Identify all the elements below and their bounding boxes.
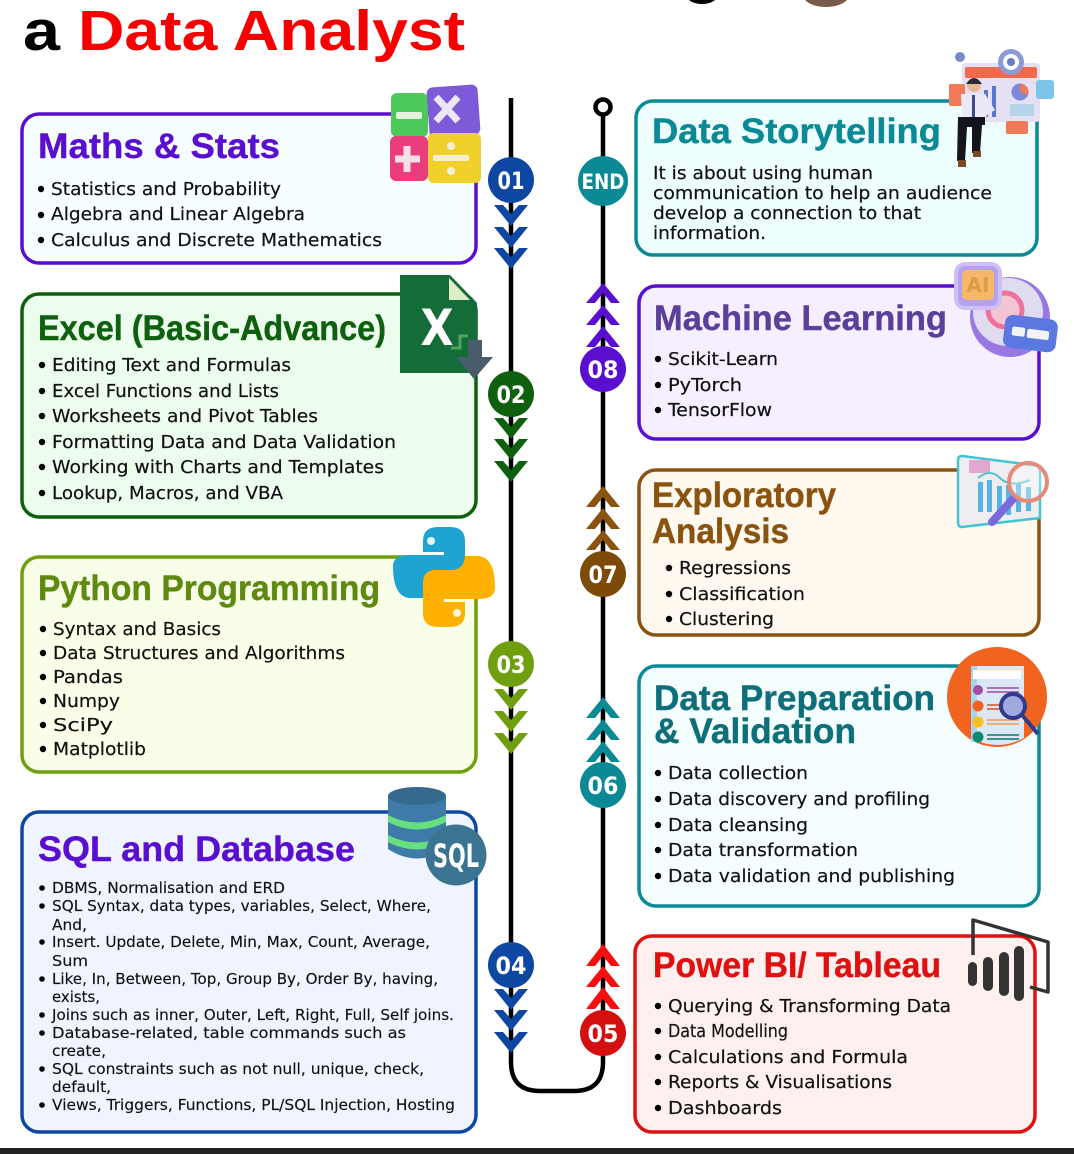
icon: python logo — [393, 527, 495, 627]
heading: SQL and Database — [38, 830, 355, 869]
list: Algebra and Linear Algebra — [51, 204, 305, 225]
panel: power bi and tableau — [635, 920, 1048, 1132]
icon: maths cubes — [390, 84, 481, 183]
marker: 01 with chevrons: 01 — [498, 167, 524, 195]
list: Dashboards — [668, 1098, 782, 1119]
icon: power bi — [968, 920, 1048, 1001]
panel: python — [22, 527, 495, 772]
list: Views, Triggers, Functions, PL/SQL Injection, Hosting — [52, 1096, 455, 1114]
heading: Analysis — [652, 512, 789, 551]
title: a — [23, 0, 62, 63]
marker: 05 with chevrons — [580, 944, 626, 1056]
heading: Machine Learning — [654, 299, 947, 338]
list — [38, 179, 382, 251]
heading — [654, 679, 935, 751]
title: Data Analyst — [78, 0, 465, 63]
panel: sql — [22, 787, 486, 1132]
list: PyTorch — [668, 375, 742, 396]
paragraph: communication to help an audience — [653, 183, 992, 204]
marker: 02 with chevrons — [488, 371, 534, 482]
paragraph — [653, 163, 992, 244]
list: Database-related, table commands such as — [52, 1024, 406, 1042]
marker: 06 with chevrons: 06 — [588, 772, 618, 800]
list: Data cleansing — [668, 815, 808, 836]
list: exists, — [52, 988, 100, 1006]
heading: & Validation — [654, 712, 856, 751]
list: Insert. Update, Delete, Min, Max, Count, Average, — [52, 933, 430, 951]
panel: exploratory analysis — [639, 456, 1047, 635]
list: And, — [52, 916, 87, 934]
list: Data collection — [668, 763, 808, 784]
marker: 04 with chevrons: 04 — [496, 952, 526, 980]
list: Worksheets and Pivot Tables — [52, 406, 318, 427]
list: Data transformation — [668, 840, 858, 861]
marker: 08 with chevrons: 08 — [588, 356, 618, 384]
marker: 01 with chevrons — [488, 157, 534, 269]
timeline line — [511, 98, 603, 1091]
list: Calculations and Formula — [668, 1047, 908, 1068]
marker: 03 with chevrons — [488, 641, 534, 754]
marker: 07 with chevrons — [580, 486, 626, 597]
heading: Data Storytelling — [652, 112, 941, 151]
panel: maths and stats — [22, 84, 481, 263]
panel: machine learning — [639, 264, 1059, 439]
heading — [652, 476, 837, 551]
list: Scikit-Learn — [668, 349, 778, 370]
list: Formatting Data and Data Validation — [52, 432, 396, 453]
icon: sql database: SQL — [433, 837, 479, 875]
marker: 07 with chevrons: 07 — [588, 561, 618, 589]
icon: excel file — [400, 275, 493, 379]
list: default, — [52, 1078, 111, 1096]
list: Querying & Transforming Data — [668, 996, 951, 1017]
marker: 06 with chevrons — [580, 697, 626, 808]
list: Data discovery and profiling — [668, 789, 930, 810]
marker: 03 with chevrons: 03 — [496, 651, 526, 679]
list — [655, 996, 951, 1119]
heading: Python Programming — [38, 569, 380, 608]
list: Clustering — [679, 609, 774, 630]
list: Data validation and publishing — [668, 866, 955, 887]
list: Sum — [52, 952, 88, 970]
paragraph: information. — [653, 223, 766, 244]
list: Statistics and Probability — [51, 179, 281, 200]
paragraph: develop a connection to that — [653, 203, 921, 224]
heading: Excel (Basic-Advance) — [38, 309, 386, 348]
list: DBMS, Normalisation and ERD — [52, 879, 285, 897]
bottom bar — [0, 1148, 1074, 1154]
list — [655, 763, 955, 887]
list: Numpy — [53, 691, 120, 712]
list: TensorFlow — [667, 400, 772, 421]
list: Matplotlib — [53, 739, 146, 760]
list: SQL Syntax, data types, variables, Select, Where, — [52, 897, 431, 915]
icon: presenter with dashboard — [949, 49, 1054, 167]
icon: chart with magnifier — [958, 456, 1047, 527]
cropped header avatars — [687, 0, 849, 7]
icon: sql database — [388, 787, 486, 886]
marker: 08 with chevrons — [580, 283, 626, 392]
list: Classification — [679, 584, 805, 605]
list: create, — [52, 1042, 106, 1060]
heading: Exploratory — [652, 476, 837, 515]
heading: Data Preparation — [654, 679, 935, 718]
panel: excel — [22, 275, 493, 517]
list: Calculus and Discrete Mathematics — [51, 230, 382, 251]
list — [655, 349, 778, 421]
list: Editing Text and Formulas — [52, 355, 291, 376]
list: SQL constraints such as not null, unique, check, — [52, 1060, 424, 1078]
list: Data Modelling — [668, 1021, 788, 1042]
list: Reports & Visualisations — [668, 1072, 892, 1093]
panel: data preparation — [639, 647, 1047, 906]
panel: data storytelling — [636, 49, 1054, 255]
list: Regressions — [679, 558, 791, 579]
list: SciPy — [53, 715, 113, 736]
paragraph: It is about using human — [653, 163, 873, 184]
icon: ai chip and disc: AI — [967, 273, 989, 297]
list: Pandas — [53, 667, 123, 688]
list — [39, 355, 396, 504]
list: Lookup, Macros, and VBA — [52, 483, 284, 504]
timeline end ring — [596, 100, 610, 114]
list: Working with Charts and Templates — [52, 457, 384, 478]
marker: 04 with chevrons — [488, 942, 534, 1053]
list: Data Structures and Algorithms — [53, 643, 345, 664]
icon: document with magnifier — [947, 647, 1047, 747]
marker: end: END — [582, 170, 624, 194]
list: Like, In, Between, Top, Group By, Order By, having, — [52, 970, 438, 988]
heading: Power BI/ Tableau — [653, 946, 941, 985]
marker: 02 with chevrons: 02 — [496, 381, 526, 409]
marker: 05 with chevrons: 05 — [588, 1020, 618, 1048]
marker: end — [578, 156, 628, 206]
list — [40, 619, 345, 760]
list — [39, 879, 455, 1114]
list: Syntax and Basics — [53, 619, 221, 640]
list: Joins such as inner, Outer, Left, Right, Full, Self joins. — [51, 1006, 454, 1024]
icon: excel file: X — [420, 299, 454, 357]
list — [666, 558, 805, 630]
icon: ai chip and disc — [956, 264, 1059, 357]
list: Excel Functions and Lists — [52, 381, 279, 402]
heading: Maths & Stats — [38, 127, 280, 166]
